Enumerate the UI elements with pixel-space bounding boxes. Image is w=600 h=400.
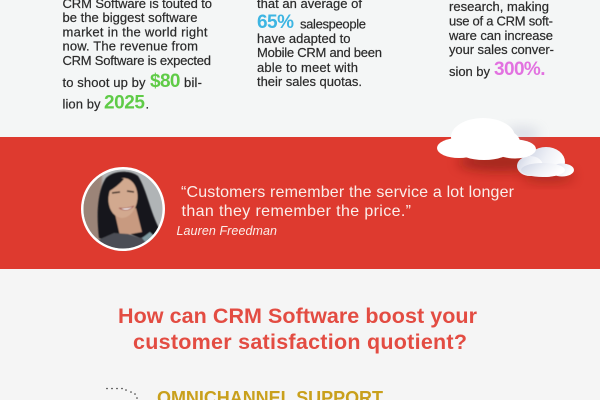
stat: sales conversion: sion by — [449, 64, 490, 79]
stat: mobile CRM: able to meet with — [257, 60, 358, 75]
quote text: than they remember the price.” — [182, 203, 411, 220]
section heading: How can CRM Software boost your — [118, 304, 478, 328]
stat: CRM market revenue: be the biggest software — [62, 10, 198, 25]
icon: dotted arc — [106, 388, 138, 399]
stat: mobile CRM — [257, 0, 382, 89]
stat: sales conversion: ware can increase — [448, 28, 553, 43]
stat: mobile CRM: Mobile CRM and been — [257, 45, 382, 60]
quote text — [181, 184, 515, 220]
stat: sales conversion — [448, 0, 554, 80]
section heading — [118, 304, 478, 354]
stat: CRM market revenue: . — [146, 96, 149, 112]
stat: sales conversion: your sales conver- — [449, 42, 554, 57]
stat: CRM market revenue: 2025 — [104, 92, 145, 114]
stat: mobile CRM: 65% — [257, 12, 294, 33]
stat: CRM market revenue: CRM Software is expected — [62, 53, 211, 68]
stat: CRM market revenue: bil- — [184, 75, 202, 90]
stat: CRM market revenue: $80 — [150, 71, 180, 92]
stat: CRM market revenue: market in the world right — [62, 24, 208, 40]
quote band — [0, 137, 600, 269]
stat: CRM market revenue: to shoot up by — [62, 75, 146, 90]
stat: mobile CRM: have adapted to — [257, 31, 350, 46]
stat: sales conversion: use of a CRM soft- — [449, 14, 553, 28]
stat: CRM market revenue — [62, 0, 212, 114]
stat: mobile CRM: salespeople — [300, 16, 366, 32]
clouds — [437, 118, 574, 182]
stat: CRM market revenue: now. The revenue from — [62, 38, 198, 54]
quote attribution: Lauren Freedman — [176, 224, 277, 238]
quote text: “Customers remember the service a lot longer — [181, 184, 515, 201]
stat: CRM market revenue: lion by — [62, 96, 101, 112]
stat: mobile CRM: their sales quotas. — [257, 74, 362, 89]
stat: sales conversion: 300%. — [494, 59, 546, 80]
portrait photo — [80, 165, 166, 255]
section heading: customer satisfaction quotient? — [133, 330, 467, 354]
